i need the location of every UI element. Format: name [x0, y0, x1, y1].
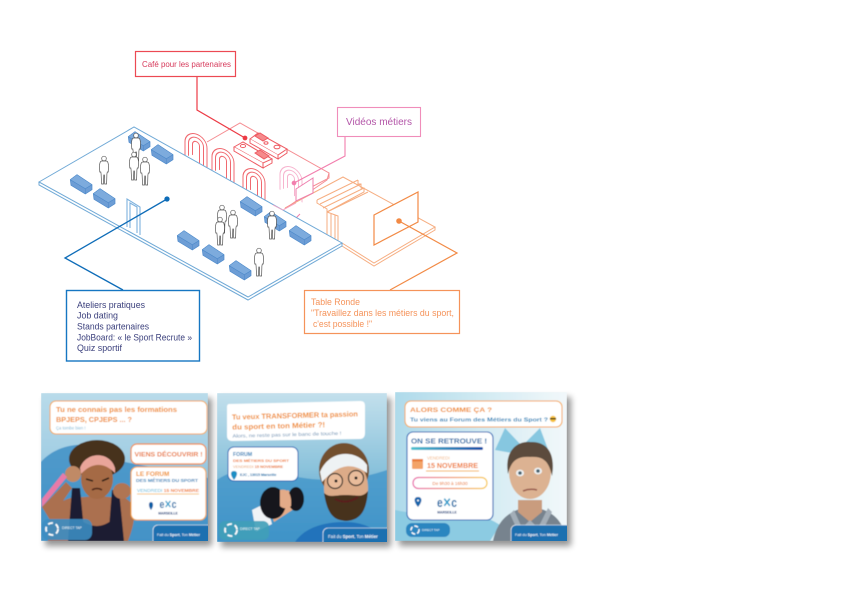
bubble: alors comme ça: ALORS COMME ÇA ? [410, 407, 492, 414]
icon: stand cube 6 [264, 212, 286, 231]
bubble: forum: DES MÉTIERS DU SPORT [233, 458, 290, 463]
bubble: forum: EJC , 13015 Marseille [240, 473, 276, 477]
bubble: question: Tu veux TRANSFORMER ta passion [232, 409, 358, 422]
callout: table ronde: Table Ronde [311, 297, 360, 307]
icon: stand cube 3 [70, 175, 92, 194]
tag: slogan: Fait du Sport, Ton Métier [328, 534, 378, 539]
icon: stand cube 10 [229, 261, 251, 280]
photo: smiling man with dumbbell [251, 442, 370, 542]
icon: stand cube 8 [177, 231, 199, 250]
bubble: forum: VENDREDI 15 NOVEMBRE [233, 465, 283, 469]
panel: banner 1 [41, 393, 213, 547]
bubble: le forum: VENDREDI 15 NOVEMBRE [137, 488, 199, 493]
bubble: le forum [131, 467, 206, 520]
bubble: le forum: LE FORUM [136, 471, 169, 478]
bubble: question: Ça tombe bien ! [56, 426, 86, 430]
callout: table ronde: "Travaillez dans les métiers du sport, [311, 308, 454, 318]
logo: direct tap [42, 519, 92, 540]
icon: person 5 [218, 205, 226, 233]
bubble: question: BPJEPS, CPJEPS ... ? [56, 415, 132, 424]
icon: person 6 [216, 217, 224, 245]
callout: café pour les partenaires [136, 52, 236, 76]
callout: vidéos métiers [338, 108, 420, 136]
logo: direct tap: DIRECT TAP [62, 526, 83, 530]
bubble: question: Alors, ne reste pas sur le banc de touche ! [232, 431, 341, 440]
callout: table ronde: c'est possible !" [313, 319, 372, 329]
bubble: alors comme ça [405, 401, 562, 427]
callout: table ronde [304, 290, 460, 334]
tag: slogan [152, 524, 208, 541]
icon: person 3 [130, 152, 138, 180]
bubble: viens découvrir: VIENS DÉCOUVRIR ! [134, 450, 202, 458]
icon: person 4 [140, 157, 150, 185]
callout: ateliers [66, 290, 200, 361]
card: on se retrouve [407, 432, 493, 520]
bubble: forum [228, 447, 298, 481]
tag: slogan [510, 524, 567, 541]
icon: stand cube 4 [93, 189, 115, 208]
logo: direct tap: DIRECT TAP [240, 527, 261, 531]
plan: floor map illustration [39, 52, 460, 361]
bubble: question: Tu ne connais pas les formations [56, 405, 177, 414]
icon: stand cube 1 [128, 132, 150, 151]
leader: ateliers [65, 197, 169, 290]
icon: stand cube 2 [151, 145, 173, 164]
bubble: forum: FORUM [233, 452, 252, 458]
bubble: question [227, 401, 365, 441]
infographic canvas [38, 50, 576, 552]
icon: red arch three [243, 166, 265, 204]
icon: person 1 [100, 156, 108, 184]
card: on se retrouve: VENDREDI [427, 456, 450, 460]
bubble: question: du sport en ton Métier ?! [232, 420, 325, 432]
panel: banner 2 [217, 393, 393, 550]
callout: ateliers: Ateliers pratiques [77, 300, 146, 310]
photo: surprised man [493, 442, 567, 541]
logo: direct tap [219, 521, 269, 540]
logo: direct tap [406, 523, 450, 537]
leader: table ronde [390, 219, 457, 290]
line: pink floor edge [273, 203, 296, 210]
icon: person 7 [228, 210, 238, 238]
tag: slogan [322, 526, 387, 542]
icon: person 8 [268, 211, 276, 239]
card: on se retrouve: MARSEILLE [437, 510, 458, 514]
icon: orange projection screen [374, 192, 418, 245]
icon: table two [234, 142, 272, 168]
bubble: alors comme ça: Tu viens au Forum des Métiers du Sport ? [410, 418, 549, 424]
panel: banner 3 [395, 392, 573, 547]
icon: stand cube 7 [289, 226, 311, 245]
icon: table one [250, 133, 287, 159]
icon: red arch one [185, 131, 207, 169]
leader: vidéos [292, 136, 345, 185]
callout: ateliers: Stands partenaires [77, 322, 150, 332]
icon: red arch two [212, 146, 234, 184]
tag: slogan: Fait du Sport, Ton Métier [157, 533, 201, 537]
card: on se retrouve: De 9h30 à 16h30 [432, 481, 468, 486]
bubble: le forum: MARSEILLE [158, 512, 179, 516]
icon: pink arch [280, 164, 302, 202]
logo: direct tap: DIRECT TAP [422, 528, 440, 532]
tag: slogan: Fait du Sport, Ton Métier [515, 533, 559, 537]
bubble: viens découvrir [131, 444, 206, 464]
bubble: le forum: DES MÉTIERS DU SPORT [136, 478, 199, 483]
icon: pink video screen [273, 178, 313, 218]
plan: red café zone [207, 123, 329, 210]
callout: ateliers: JobBoard: « le Sport Recrute » [77, 332, 192, 342]
card: on se retrouve: ON SE RETROUVE ! [411, 436, 487, 446]
plan: orange round table zone [285, 177, 435, 266]
bubble: question [50, 401, 207, 434]
icon: stand cube 5 [240, 197, 262, 216]
photo: athlete blocking ears [42, 440, 134, 541]
icon: door [127, 199, 140, 235]
callout: vidéos métiers: Vidéos métiers [346, 117, 412, 128]
card: on se retrouve: 15 NOVEMBRE [427, 463, 478, 470]
icon: stand cube 9 [202, 245, 224, 264]
bubble: le forum: e✕c [160, 499, 176, 511]
callout: ateliers: Quiz sportif [77, 343, 123, 353]
plan: blue main floor [39, 127, 342, 300]
icon: person 9 [254, 248, 264, 276]
card: on se retrouve: e✕c [437, 495, 457, 510]
leader: café [197, 76, 247, 140]
callout: café pour les partenaires: Café pour les partenaires [142, 59, 231, 69]
callout: ateliers: Job dating [77, 310, 118, 320]
icon: person 2 [132, 133, 140, 161]
